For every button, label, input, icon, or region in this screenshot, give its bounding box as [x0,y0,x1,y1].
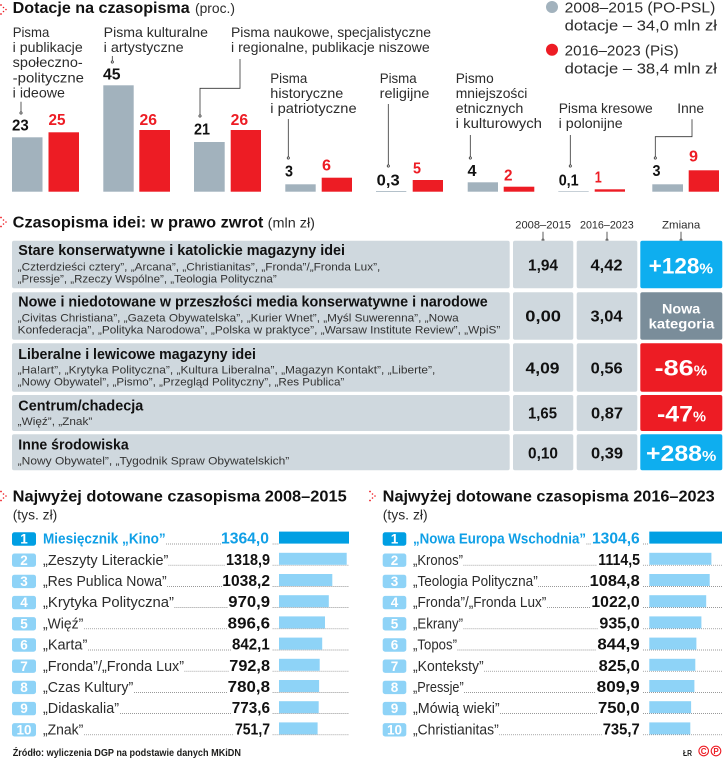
heading: top funded 2008-2015: Najwyżej dotowane czasopisma 2008–2015 [13,489,347,506]
rank 3 [12,573,349,590]
heading: magazines of ideas: Czasopisma idei: w prawo zwrot [13,215,264,232]
rank 8: 8 [391,680,399,695]
bar group: ethnic and cultural minority magazines: i kulturowych [456,115,542,131]
rank 3: „Teologia Polityczna” [413,574,538,590]
bar group: other magazines: 3 [652,163,661,180]
row: new and previously unfunded conservative media: Nowe i niedotowane w przeszłości media konserwatywne i narodowe [18,295,488,311]
rank 10 [383,721,722,738]
rank 7: 7 [391,659,398,674]
rank 2 [12,552,349,569]
rank 6 [12,637,349,654]
row: centre and Christian democrats: -47 [657,402,693,427]
rank 10 [12,721,349,738]
rank 10: 735,7 [603,721,640,738]
rank 4: „Fronda”/„Fronda Lux” [413,595,546,611]
bar group: borderland and Polonia magazines: 0,1 [559,173,579,190]
panel: magazines of ideas table [0,215,722,470]
rank 10: „Znak” [43,722,83,738]
bar group: cultural and artistic magazines: Pisma kulturalne [104,24,208,40]
row: new and previously unfunded conservative media: Nowa [662,300,701,316]
bar group: social and political magazines: 25 [48,112,66,129]
bar group: cultural and artistic magazines: i artystyczne [104,39,184,55]
bar group: cultural and artistic magazines [103,24,208,192]
author credit and copyright icons: P [713,747,719,756]
rank 3 [383,573,722,590]
rank 1: 1 [391,532,399,547]
rank 7: „Fronda”/„Fronda Lux” [43,659,184,675]
row: liberal and left-wing magazines: Liberalne i lewicowe magazyny idei [18,347,256,363]
rank 4 [12,594,349,611]
rank 7: „Konteksty” [413,659,484,675]
rank 4: 4 [20,595,28,610]
bar group: ethnic and cultural minority magazines: Pismo [456,70,494,86]
rank 9: „Didaskalia” [43,701,119,717]
row: old conservative and Catholic magazines: „Pressje”, „Rzeczy Wspólne”, „Teologia Polityczna” [18,274,277,286]
source note: Źródło: wyliczenia DGP na podstawie danych MKiDN [13,746,241,759]
rank 9 [383,700,722,717]
bar group: religious magazines: Pisma [380,70,417,86]
row: new and previously unfunded conservative media: Konfederacja”, „Polityka Narodowa”, „Polska w praktyce”, „Warsaw Institute Review”, „WpiS” [18,324,501,336]
heading: top funded 2008-2015 [0,489,347,522]
rank 4: 4 [391,595,399,610]
rank 6: 844,9 [597,637,640,654]
rank 9: 9 [20,701,28,716]
rank 5: 5 [391,616,399,631]
rank 5: 5 [20,616,28,631]
row: old conservative and Catholic magazines: „Czterdzieści cztery”, „Arcana”, „Christianitas”, „Fronda”/„Fronda Lux”, [18,262,380,274]
bar group: historical and patriotic magazines: Pisma [270,70,307,86]
column headers [515,219,701,241]
row: liberal and left-wing magazines: „Nowy Obywatel”, „Pismo”, „Przegląd Polityczny”, „Res Publica” [18,377,345,389]
rank 5: „Ekrany” [413,616,463,632]
rank 5: 896,6 [228,615,270,632]
rank 3: „Res Publica Nowa” [43,574,167,590]
rank 7: 792,8 [229,658,270,675]
column headers: 2016–2023 [580,219,634,231]
row: new and previously unfunded conservative media: „Civitas Christiana”, „Gazeta Obywatelska”, „Kurier Wnet”, „Myśl Suwerenna”, „Nowa [18,313,460,325]
row: other circles: „Nowy Obywatel”, „Tygodnik Spraw Obywatelskich” [18,455,290,467]
row: liberal and left-wing magazines [12,343,722,392]
heading: grants: (proc.) [195,0,235,16]
rank 1 [12,531,349,548]
row: old conservative and Catholic magazines: +128 [649,253,699,278]
row: other circles [12,434,722,470]
bar group: scientific and regional magazines [194,24,431,192]
heading: magazines of ideas: (mln zł) [268,215,315,231]
heading: grants: Dotacje na czasopisma [13,0,190,17]
row: centre and Christian democrats: Centrum/chadecja [18,398,144,414]
rank 4 [383,594,722,611]
rank 8: 780,8 [228,679,270,696]
row: old conservative and Catholic magazines: 4,42 [590,258,623,275]
bar group: social and political magazines: 23 [12,118,29,135]
rank 1 [383,531,722,548]
rank 1: Miesięcznik „Kino” [43,532,166,548]
panel: grants by magazine category [0,0,719,192]
row: other circles: 0,39 [591,445,623,462]
row: other circles: % [702,448,716,465]
bar group: social and political magazines: -polityczne [13,70,84,86]
rank 2: 2 [20,553,28,568]
bar group: cultural and artistic magazines: 26 [140,112,157,129]
bar group: other magazines [652,100,719,192]
bar group: historical and patriotic magazines [270,70,357,192]
bar group: borderland and Polonia magazines [558,100,653,192]
rank 3: 3 [20,574,28,589]
rank 5 [12,615,349,632]
rank 6: 842,1 [232,637,270,654]
row: other circles: 0,10 [528,445,558,462]
rank 1: 1304,6 [592,531,640,548]
rank 9: 750,0 [598,700,640,717]
rank 2 [383,552,722,569]
row: centre and Christian democrats: % [693,409,706,426]
rank 2: 1318,9 [226,552,270,569]
author credit and copyright icons [683,746,721,758]
bar group: ethnic and cultural minority magazines: mniejszości [456,85,527,101]
rank 9 [12,700,349,717]
rank 2: „Kronos” [413,553,463,569]
row: new and previously unfunded conservative media: 0,00 [525,309,561,326]
panel: top funded magazines 2016-2023 [369,489,722,738]
row: old conservative and Catholic magazines: % [699,260,713,277]
row: new and previously unfunded conservative media [12,292,722,340]
bar group: cultural and artistic magazines: 45 [103,66,121,83]
rank 3: 1084,8 [590,573,640,590]
row: liberal and left-wing magazines: -86 [655,356,694,381]
legend: dotacje – 38,4 mln zł [565,60,718,77]
rank 8: 8 [20,680,28,695]
bar group: social and political magazines: Pisma [13,24,49,40]
rank 5: „Więź” [43,616,83,632]
row: new and previously unfunded conservative media: 3,04 [590,309,623,326]
rank 10: „Christianitas” [413,722,499,738]
author credit and copyright icons: ŁR [683,749,692,758]
rank 8 [12,679,349,696]
row: liberal and left-wing magazines: % [694,363,707,380]
rank 9: 9 [391,701,398,716]
row: liberal and left-wing magazines: 4,09 [526,361,560,378]
rank 7 [12,658,349,675]
rank 4: 970,9 [228,594,270,611]
bar group: scientific and regional magazines: Pisma naukowe, specjalistyczne [231,24,431,40]
rank 7: 825,0 [599,658,640,675]
rank 8 [383,679,722,696]
rank 5: 935,0 [599,615,640,632]
rank 8: „Czas Kultury” [43,680,133,696]
column headers: Zmiana [662,219,701,231]
rank 6: „Karta” [43,638,87,654]
bar group: religious magazines [376,70,443,192]
bar group: scientific and regional magazines: 26 [231,112,249,129]
bar group: religious magazines: religijne [380,85,430,101]
bar group: other magazines: Inne [677,100,704,116]
legend: 2016–2023 (PiS) [565,43,679,60]
rank 3: 3 [391,574,399,589]
rank 9: „Mówią wieki” [413,701,500,717]
row: centre and Christian democrats: „Więź”, „Znak” [18,416,93,428]
bar group: social and political magazines: społeczno- [13,54,83,70]
rank 7 [383,658,722,675]
legend [546,0,718,77]
rank 6 [383,637,722,654]
row: centre and Christian democrats [12,395,722,431]
bar group: ethnic and cultural minority magazines: 2 [504,167,512,184]
heading: top funded 2008-2015: (tys. zł) [13,506,57,522]
bar group: social and political magazines: i ideowe [13,84,65,100]
rank 8: 809,9 [597,679,640,696]
heading: top funded 2016-2023 [369,489,715,522]
rank 8: „Pressje” [413,680,464,696]
rank 10: 10 [387,722,402,737]
rank 6: „Topos” [413,638,457,654]
row: liberal and left-wing magazines: „Ha!art”, „Krytyka Polityczna”, „Kultura Liberalna”, „Magazyn Kontakt”, „Liberte”, [18,364,435,376]
bar group: social and political magazines: i publikacje [13,39,83,55]
bar group: scientific and regional magazines: 21 [194,121,210,138]
row: liberal and left-wing magazines: 0,56 [591,361,623,378]
bar group: borderland and Polonia magazines: i polonijne [559,115,623,131]
bar group: historical and patriotic magazines: historyczne [270,85,344,101]
row: other circles: Inne środowiska [18,437,130,453]
author credit and copyright icons: C [701,747,707,756]
rank 6: 6 [20,638,28,653]
bar group: religious magazines: 0,3 [377,173,400,190]
rank 1: „Nowa Europa Wschodnia” [413,532,586,548]
rank 2: „Zeszyty Literackie” [43,553,168,569]
rank 7: 7 [20,659,28,674]
rank 9: 773,6 [232,700,270,717]
rank 2: 1114,5 [598,552,640,569]
row: centre and Christian democrats: 1,65 [528,405,557,422]
bar group: ethnic and cultural minority magazines [456,70,542,192]
legend: 2008–2015 (PO-PSL) [565,0,715,17]
row: new and previously unfunded conservative media: kategoria [649,315,715,331]
row: old conservative and Catholic magazines: 1,94 [528,258,558,275]
row: centre and Christian democrats: 0,87 [591,405,623,422]
bar group: scientific and regional magazines: i regionalne, publikacje niszowe [231,39,430,55]
heading: top funded 2016-2023: (tys. zł) [383,506,428,522]
bar group: borderland and Polonia magazines: Pisma kresowe [559,100,653,116]
bar group: social and political magazines [12,24,84,192]
heading: top funded 2016-2023: Najwyżej dotowane czasopisma 2016–2023 [383,489,715,506]
bar group: historical and patriotic magazines: 6 [322,158,331,175]
row: other circles: +288 [646,441,702,466]
rank 4: „Krytyka Polityczna” [43,595,174,611]
bar group: borderland and Polonia magazines: 1 [595,170,602,187]
rank 10: 751,7 [235,721,270,738]
row: old conservative and Catholic magazines: Stare konserwatywne i katolickie magazyny idei [18,243,345,259]
rank 1: 1364,0 [221,531,269,548]
rank 4: 1022,0 [591,594,640,611]
column headers: 2008–2015 [515,219,571,231]
rank 5 [383,615,722,632]
bar group: ethnic and cultural minority magazines: 4 [468,163,477,180]
panel: top funded magazines 2008-2015 [0,489,349,738]
legend: dotacje – 34,0 mln zł [565,18,718,35]
rank 1: 1 [20,532,28,547]
bar group: ethnic and cultural minority magazines: etnicznych [456,100,523,116]
rank 3: 1038,2 [222,573,270,590]
bar group: historical and patriotic magazines: 3 [285,164,293,181]
rank 2: 2 [391,553,398,568]
rank 10: 10 [16,722,32,737]
bar group: historical and patriotic magazines: i patriotyczne [270,100,357,116]
bar group: religious magazines: 5 [413,160,421,177]
row: old conservative and Catholic magazines [12,241,722,288]
bar group: other magazines: 9 [689,149,698,166]
rank 6: 6 [391,638,399,653]
